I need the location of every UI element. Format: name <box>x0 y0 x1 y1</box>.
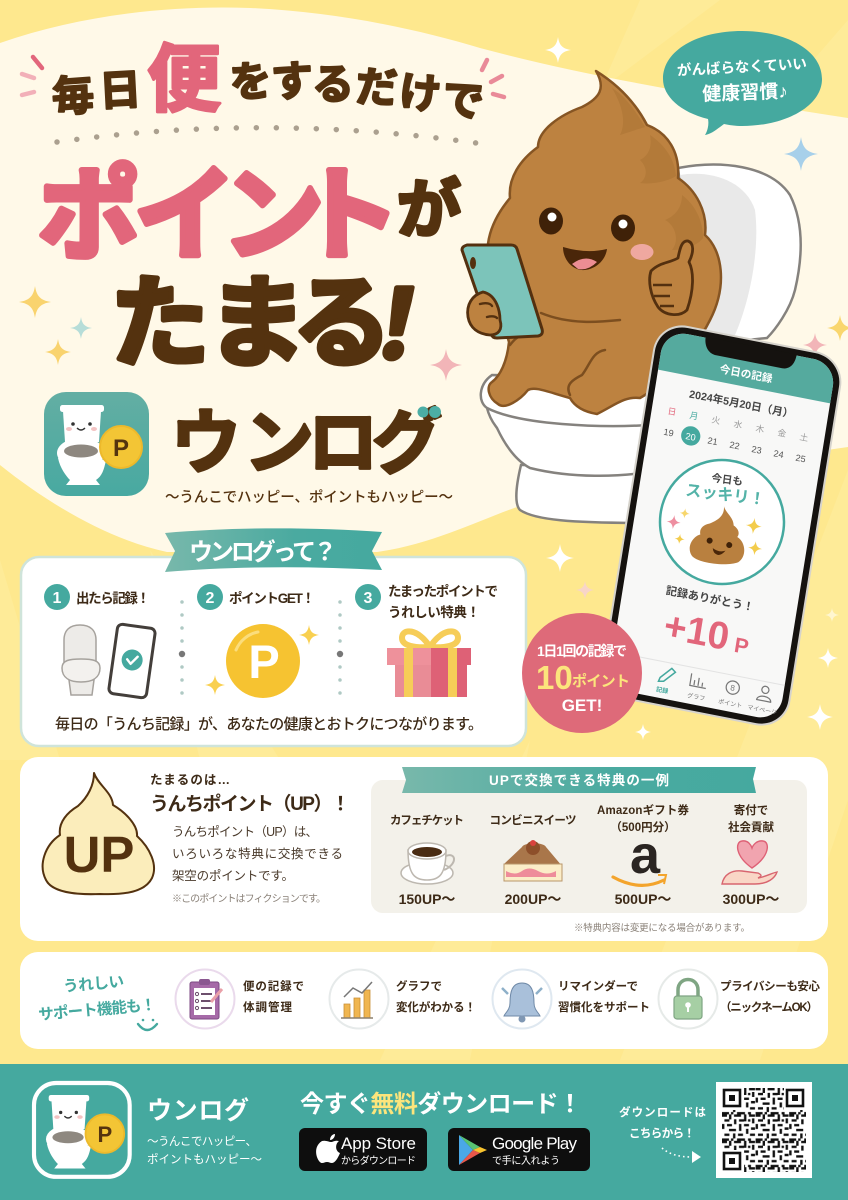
rewards box <box>371 767 807 913</box>
calendar: 金 <box>777 426 788 439</box>
plus points: P <box>733 633 750 659</box>
step 1 heading <box>44 584 150 610</box>
step 1 heading: 出たら記録！ <box>76 591 150 606</box>
calendar: 22 <box>729 440 740 451</box>
ribbon heading <box>165 528 382 572</box>
toilet behind mascot <box>481 165 801 523</box>
arrow to QR <box>662 1148 701 1163</box>
footer logo <box>147 1096 262 1166</box>
icon: toilet <box>62 625 100 695</box>
belly line <box>510 313 620 395</box>
button: App Store: App Store <box>341 1134 416 1153</box>
icon: UP poop <box>43 773 154 894</box>
status circle: 今日も <box>711 471 744 488</box>
reward: cafe ticket: 150UP〜 <box>399 891 455 907</box>
title accent lines <box>22 57 504 97</box>
footer logo: ウンログ <box>147 1096 249 1125</box>
UP description <box>172 825 343 883</box>
plus points: +10 <box>661 604 732 659</box>
step 3 heading <box>355 584 498 620</box>
fiction note: ※このポイントはフィクションです。 <box>172 893 326 905</box>
shading swirls <box>612 88 703 250</box>
QR code <box>716 1082 812 1178</box>
calendar: 水 <box>733 418 744 430</box>
smartphone mockup: 今日の記録 <box>719 363 774 386</box>
reward: Amazon gift: Amazonギフト券 <box>597 803 690 817</box>
step 2 heading: ポイントGET！ <box>229 591 315 606</box>
QR prompt: ダウンロードは <box>619 1105 706 1119</box>
reward: donation <box>722 803 779 907</box>
app logo: ウンログ: ウンログ <box>171 387 442 488</box>
status circle: スッキリ！ <box>684 482 766 509</box>
reward: donation: 社会貢献 <box>728 820 774 834</box>
UP headings: たまるのは… <box>150 773 230 787</box>
calendar: 24 <box>773 448 784 460</box>
reward: sweets <box>490 813 576 907</box>
rewards note: ※特典内容は変更になる場合があります。 <box>574 922 750 934</box>
title line 1: をするだけで <box>228 56 487 127</box>
icon: gift <box>387 631 471 697</box>
badge: 10 points: 10 <box>536 659 573 696</box>
title line 2: ポイント <box>38 159 400 273</box>
badge: 10 points <box>522 613 642 733</box>
feature: privacy <box>658 970 820 1028</box>
calendar: 土 <box>799 431 810 443</box>
panel: what is Unlog <box>21 528 526 746</box>
calendar: 2024年5月20日（月） <box>688 388 794 421</box>
dotted separators <box>182 602 340 697</box>
feature: reminder <box>492 970 650 1028</box>
panel caption: 毎日の「うんち記録」が、あなたの健康とおトクにつながります。 <box>55 715 483 733</box>
reward: Amazon gift: 500UP〜 <box>615 891 671 907</box>
step 2 heading: 2 <box>206 590 215 607</box>
nav bar: 記録 <box>656 685 669 695</box>
reward: donation: 300UP〜 <box>723 891 779 907</box>
UP headings <box>150 773 350 815</box>
icon: phone with check <box>108 624 156 698</box>
reward: Amazon gift: a <box>630 825 661 885</box>
held phone <box>462 245 542 338</box>
smartphone mockup <box>598 320 846 731</box>
feature: privacy: プライバシーも安心 <box>720 979 820 993</box>
nav bar: グラフ <box>687 691 706 703</box>
mouth <box>563 247 607 270</box>
step 3 heading: たまったポイントで <box>388 584 498 599</box>
title line 1: 便 <box>147 38 221 121</box>
support heading: うれしい <box>62 973 125 996</box>
speech bubble <box>663 31 822 135</box>
UP description: いろいろな特典に交換できる <box>172 846 343 861</box>
icon: coin: P <box>248 635 280 688</box>
reward: sweets: コンビニスイーツ <box>490 813 576 827</box>
calendar: 20 <box>685 431 696 443</box>
step 3 heading: 3 <box>364 590 373 607</box>
support heading: サポート機能も！ <box>38 995 157 1024</box>
icon: coin <box>205 624 319 698</box>
calendar <box>662 384 813 468</box>
calendar: 木 <box>755 422 766 435</box>
button: App Store: からダウンロード <box>341 1154 416 1167</box>
footer logo: ポイントもハッピー〜 <box>147 1153 262 1166</box>
reward: sweets: 200UP〜 <box>505 891 561 907</box>
button: Google Play: Google Play <box>492 1134 578 1153</box>
eyes <box>539 208 635 242</box>
ribbon heading: ウンログって？ <box>189 538 337 566</box>
nav bar: 8 <box>730 683 736 693</box>
icon: UP poop: UP <box>64 826 134 883</box>
button: Google Play: で手に入れよう <box>492 1154 560 1167</box>
calendar: 火 <box>711 415 721 426</box>
feature: privacy: （ニックネームOK） <box>720 1000 818 1014</box>
step 3 heading: うれしい特典！ <box>388 604 480 620</box>
footer logo: 〜うんこでハッピー、 <box>147 1135 257 1148</box>
step 1 heading: 1 <box>53 590 62 607</box>
nav bar <box>608 652 785 717</box>
held phone camera <box>470 257 476 269</box>
feature: graph <box>330 970 476 1028</box>
reward: Amazon gift: （500円分） <box>610 820 676 834</box>
reward: Amazon gift <box>597 803 690 907</box>
feature: graph: グラフで <box>396 979 442 993</box>
QR prompt: こちらから！ <box>629 1127 695 1140</box>
footer app icon <box>34 1083 130 1177</box>
body <box>487 71 721 414</box>
dotted arc divider <box>57 128 490 145</box>
feature: record: 便の記録で <box>243 979 304 993</box>
decorative sparkles <box>19 37 848 740</box>
panel: UP points <box>20 757 828 941</box>
badge: 10 points: GET! <box>562 696 602 715</box>
feature: reminder: 習慣化をサポート <box>558 1000 650 1014</box>
nav bar: ポイント <box>718 697 743 710</box>
title line 3: ！ <box>341 274 454 379</box>
calendar: 21 <box>707 435 718 447</box>
QR prompt <box>619 1105 706 1140</box>
footer band <box>0 1064 848 1200</box>
title line 3: たまる <box>110 268 392 380</box>
button: Google Play <box>448 1128 590 1171</box>
screen header <box>658 330 837 403</box>
panel: support features <box>20 952 828 1049</box>
calendar: 19 <box>663 427 674 439</box>
tagline: 〜うんこでハッピー、ポイントもハッピー〜 <box>165 489 453 506</box>
calendar: 月 <box>689 410 699 422</box>
nav bar: マイページ <box>747 704 778 717</box>
button: App Store <box>299 1128 427 1171</box>
app icon <box>44 392 149 496</box>
support heading <box>38 973 157 1030</box>
speech bubble: がんばらなくていい <box>677 55 807 79</box>
calendar: 25 <box>795 453 806 464</box>
title line 2: が <box>397 174 461 246</box>
mascot poop character <box>462 71 721 414</box>
badge: 10 points: 1日1回の記録で <box>537 643 627 659</box>
left hand <box>468 292 501 335</box>
thumbs up hand <box>650 241 693 315</box>
rewards ribbon: UPで交換できる特典の一例 <box>489 772 669 788</box>
title line 1: 毎日 <box>50 66 142 121</box>
feature: record: 体調管理 <box>243 1000 292 1014</box>
calendar: 23 <box>751 444 762 456</box>
feature: graph: 変化がわかる！ <box>396 1000 476 1014</box>
download heading: 今すぐ無料ダウンロード！ <box>300 1090 582 1118</box>
UP headings: うんちポイント（UP）！ <box>150 792 350 815</box>
reward: cafe ticket: カフェチケット <box>390 814 464 827</box>
reward: cafe ticket <box>390 814 464 907</box>
badge: 10 points: ポイント <box>572 673 630 690</box>
speech bubble: 健康習慣♪ <box>702 81 788 105</box>
rewards ribbon <box>402 767 756 793</box>
reward: donation: 寄付で <box>734 803 768 817</box>
feature: reminder: リマインダーで <box>558 979 638 993</box>
record message: 記録ありがとう！ <box>665 583 755 614</box>
separator hubs <box>179 651 343 657</box>
UP description: 架空のポイントです。 <box>172 869 294 883</box>
cheek <box>630 244 654 260</box>
feature: record <box>176 970 304 1028</box>
status circle <box>653 453 791 591</box>
step 2 heading <box>197 584 315 610</box>
calendar: 日 <box>667 406 677 417</box>
title line 1 <box>50 38 487 127</box>
UP description: うんちポイント（UP）は、 <box>172 825 318 839</box>
